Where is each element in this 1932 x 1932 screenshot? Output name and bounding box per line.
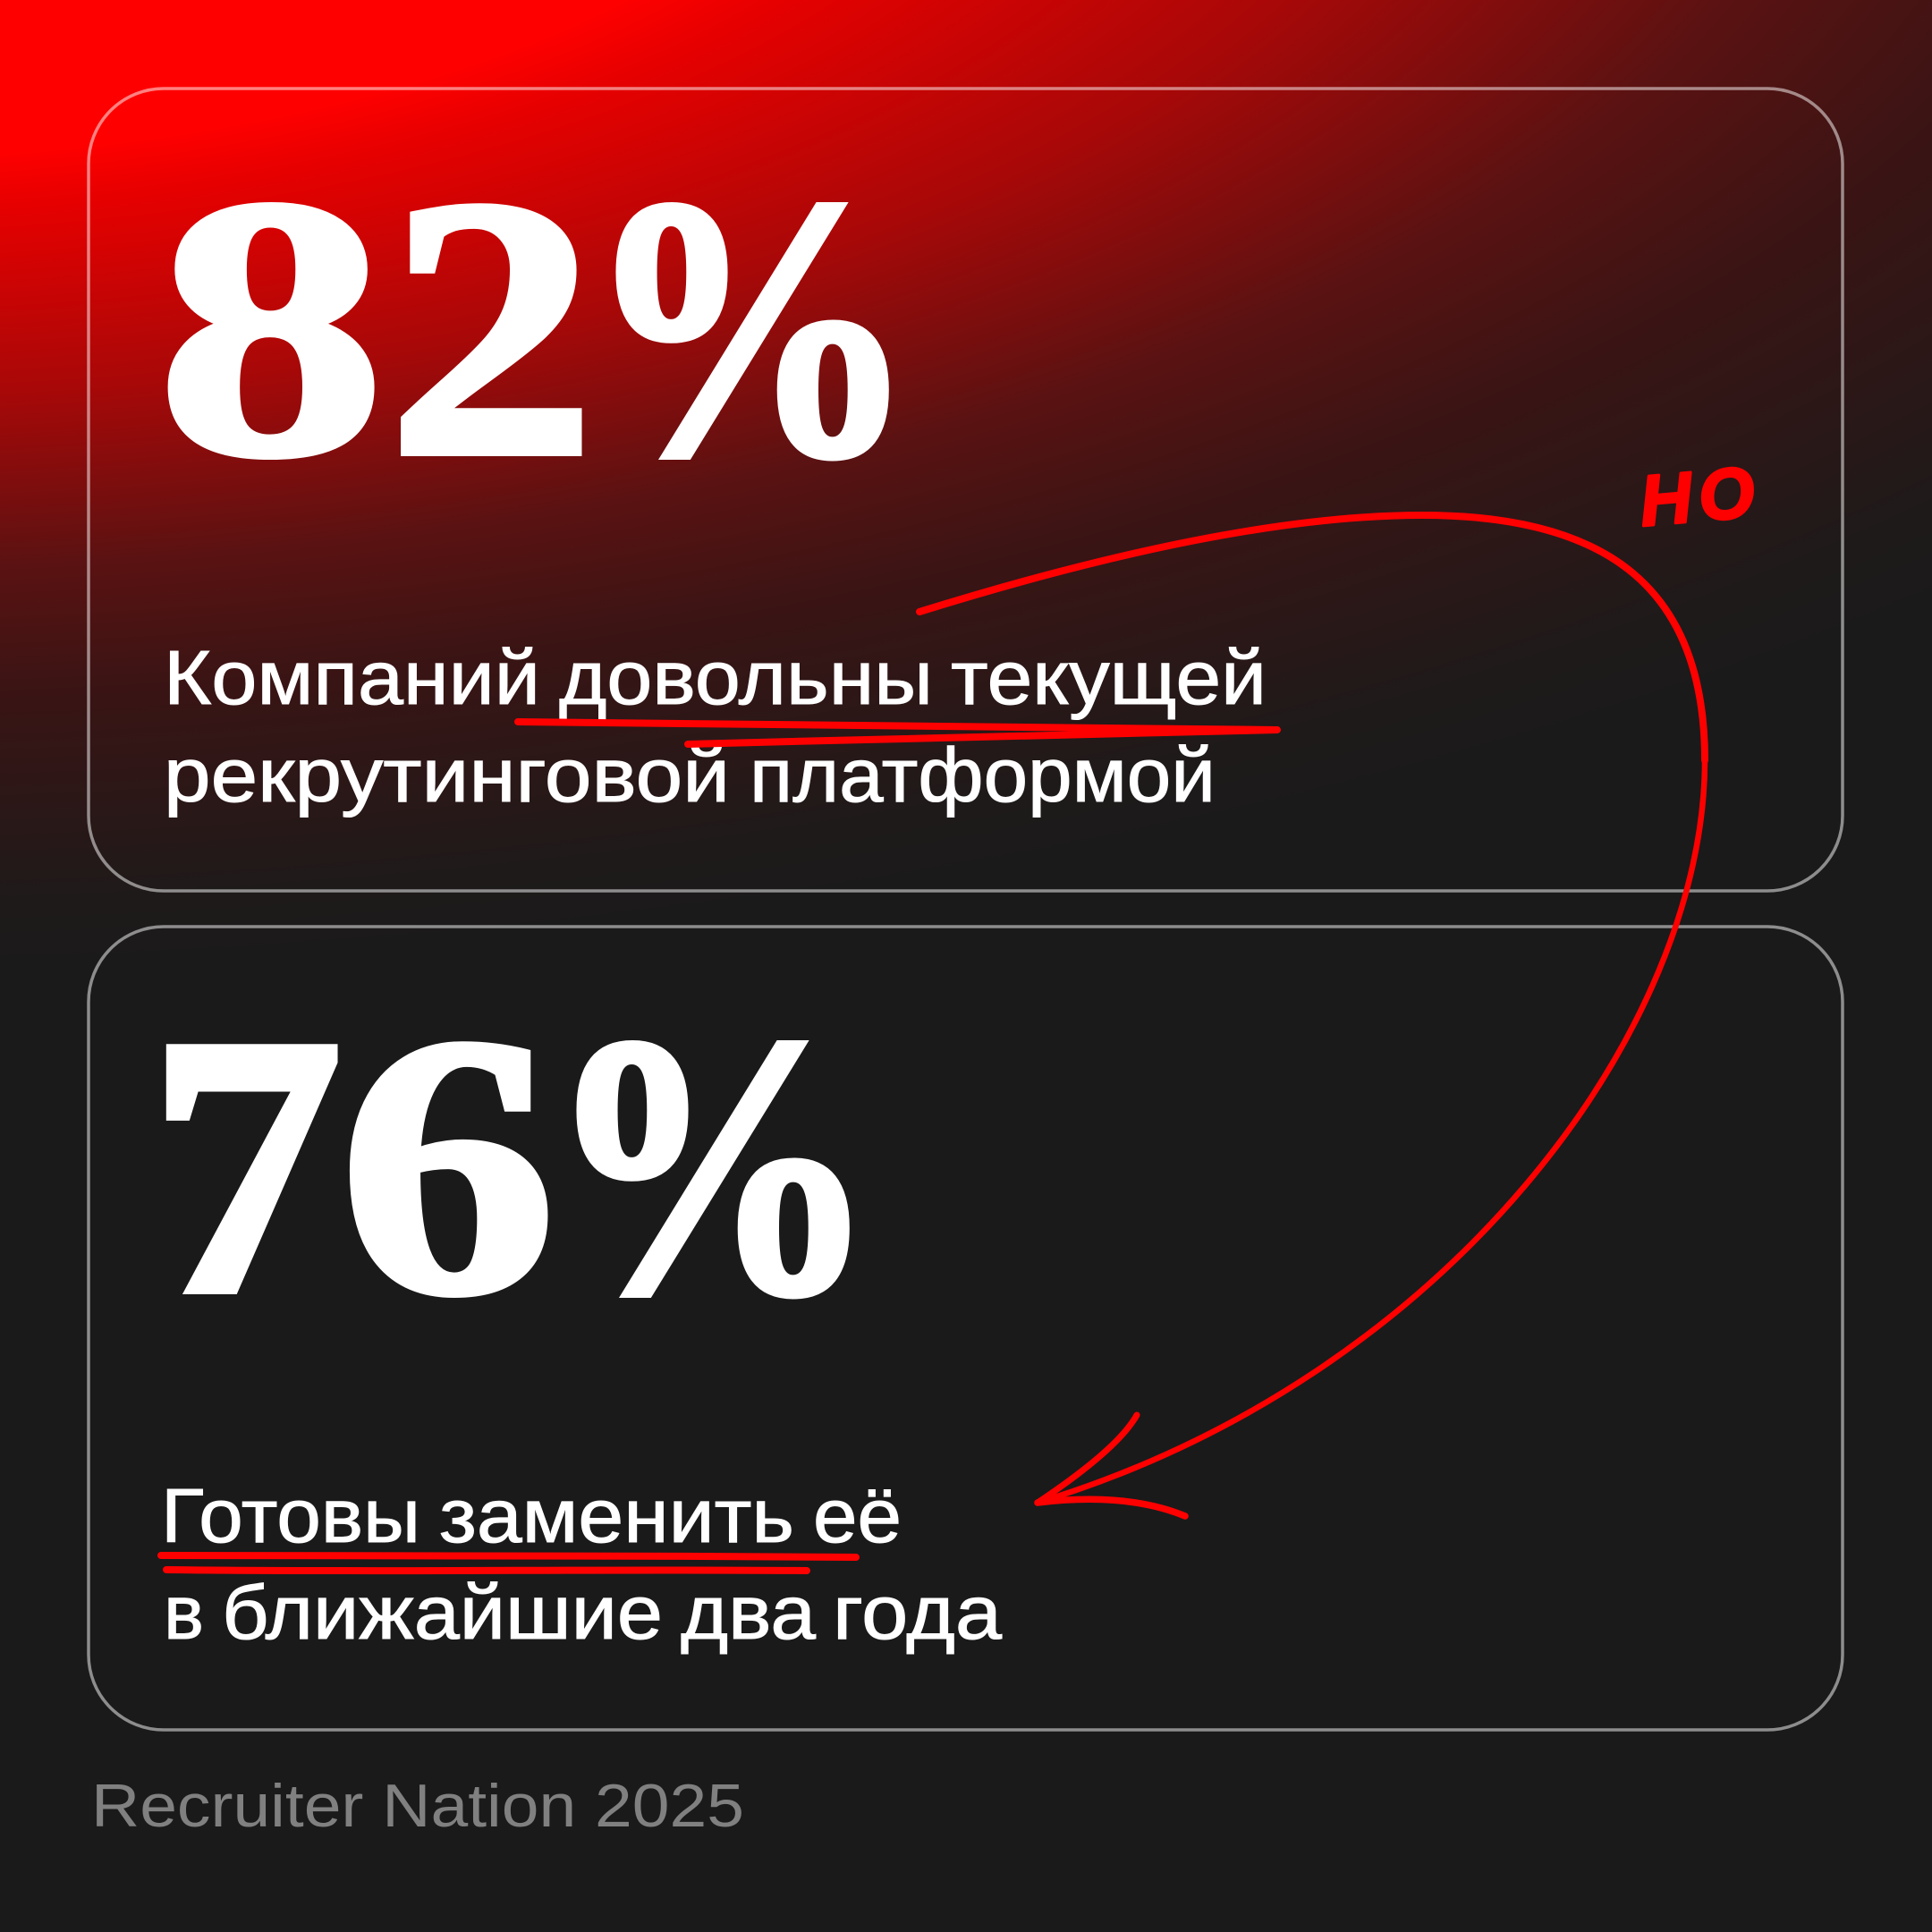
text: ready to replace: ближайшие [222, 1571, 663, 1656]
text: ready to replace: два [681, 1571, 817, 1656]
text: companies satisfied: довольны [559, 636, 933, 721]
stat: 76%: 7 [148, 960, 343, 1371]
text: companies satisfied: рекрутинговой [164, 733, 730, 818]
text: companies satisfied: Компаний [164, 636, 540, 721]
stat: 76%: % [546, 960, 877, 1371]
text: ready to replace: года [833, 1571, 1003, 1656]
source note: Recruiter Nation 2025 [91, 1772, 744, 1840]
text: ready to replace: заменить [439, 1474, 794, 1559]
panel: 82 percent [89, 89, 1843, 891]
stat: 82%: 2 [387, 122, 596, 533]
text: companies satisfied [164, 636, 1267, 818]
text: ready to replace: Готовы [161, 1474, 420, 1559]
text: ready to replace: её [813, 1474, 902, 1559]
arrowhead upper barb [1038, 1415, 1137, 1503]
panel: 76 percent [89, 927, 1843, 1730]
stat: 76%: 6 [339, 960, 556, 1371]
underline: ready to replace [161, 1555, 856, 1571]
stat: 82%: % [585, 122, 917, 533]
handwritten label: НО: НО [1637, 451, 1765, 541]
arrow: from top panel to bottom panel [919, 515, 1705, 1516]
underline: satisfied with current [518, 722, 1277, 744]
text: companies satisfied: текущей [951, 636, 1267, 721]
stat: 82%: 8 [157, 122, 386, 533]
text: ready to replace: в [164, 1571, 204, 1656]
text: ready to replace [161, 1474, 1003, 1656]
text: companies satisfied: платформой [750, 733, 1216, 818]
arrowhead lower barb [1038, 1499, 1185, 1516]
stat: 76% [148, 960, 877, 1371]
stat: 82% [157, 122, 917, 533]
